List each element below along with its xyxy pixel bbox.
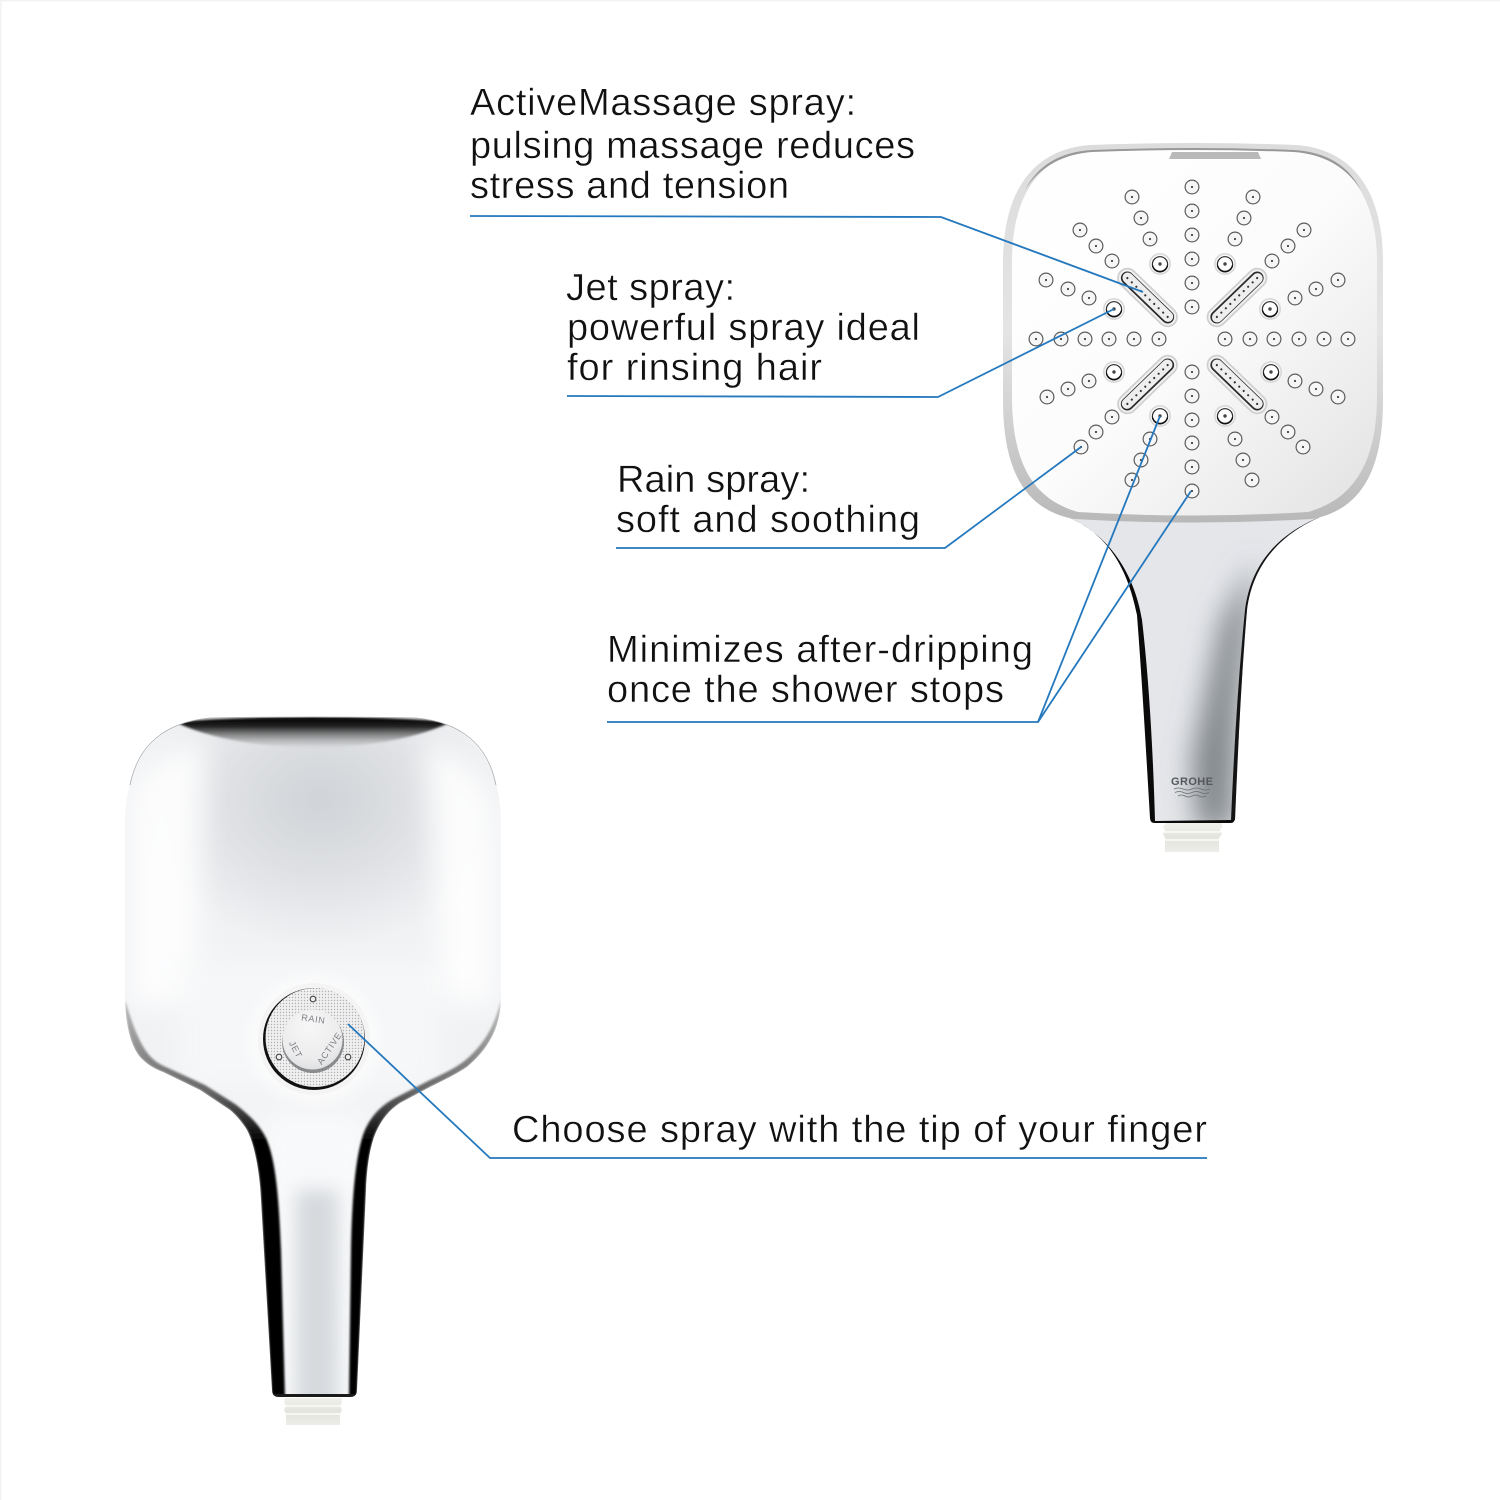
shower front view <box>1003 143 1383 852</box>
knob rim <box>258 983 370 1095</box>
face top edge line <box>1025 148 1361 190</box>
leader line <box>348 1024 1207 1158</box>
callout text: stress and tension <box>470 165 789 207</box>
callout text: ActiveMassage spray: <box>470 82 856 124</box>
knob halo <box>250 976 378 1104</box>
dial screws <box>276 996 351 1060</box>
callout text: pulsing massage reduces <box>470 125 915 167</box>
knob black ring <box>263 988 365 1090</box>
callout text: Choose spray with the tip of your finger <box>512 1109 1207 1151</box>
logo: GROHE <box>1171 776 1213 797</box>
top dark reflection <box>175 717 451 748</box>
logo: GROHE: GROHE <box>1171 776 1213 788</box>
second leader line <box>1038 491 1191 722</box>
leader line <box>616 447 1081 548</box>
hose connector thread <box>284 1398 342 1425</box>
side highlights <box>136 746 492 1196</box>
label: JET: JET <box>287 1039 304 1060</box>
shower head face <box>1012 149 1377 516</box>
massage spray bars <box>1126 276 1259 406</box>
leader line <box>470 216 1143 292</box>
callout: Rain spray <box>616 447 1081 548</box>
jet nozzles <box>1103 253 1282 427</box>
callout text: Jet spray: <box>566 267 735 309</box>
leader line <box>567 309 1114 397</box>
left chrome edge <box>125 1000 285 1397</box>
label: ACTIVE: ACTIVE <box>315 1030 344 1066</box>
shower back view <box>120 710 510 1425</box>
handle bottom edge <box>274 1394 356 1397</box>
right chrome edge <box>349 1000 501 1397</box>
callout text: powerful spray ideal <box>567 307 920 349</box>
callout text: for rinsing hair <box>567 347 822 389</box>
handle centre sheen <box>296 1190 338 1420</box>
callout text: soft and soothing <box>616 499 920 541</box>
callout text: Minimizes after-dripping <box>607 629 1033 671</box>
back body clip group <box>120 710 510 1420</box>
slider tab <box>1169 152 1261 159</box>
back body <box>125 718 501 1124</box>
top edge outline <box>130 717 496 785</box>
callout: Minimizes after-dripping <box>607 416 1191 722</box>
hose connector thread <box>1163 823 1222 852</box>
selector knob <box>250 976 378 1104</box>
callout: Jet spray <box>566 267 1114 397</box>
button shadow <box>282 1011 344 1073</box>
label: RAIN: RAIN <box>301 1012 326 1026</box>
callout text: once the shower stops <box>607 669 1004 711</box>
callout: ActiveMassage spray <box>470 82 1143 292</box>
rain nozzles <box>1029 180 1355 498</box>
leader line <box>607 416 1160 722</box>
dotted dial <box>266 988 364 1087</box>
callout: Choose spray <box>348 1024 1207 1158</box>
callout text: Rain spray: <box>617 459 810 501</box>
button <box>282 1010 342 1070</box>
handle <box>1062 515 1325 830</box>
shower head rim <box>1003 143 1383 522</box>
